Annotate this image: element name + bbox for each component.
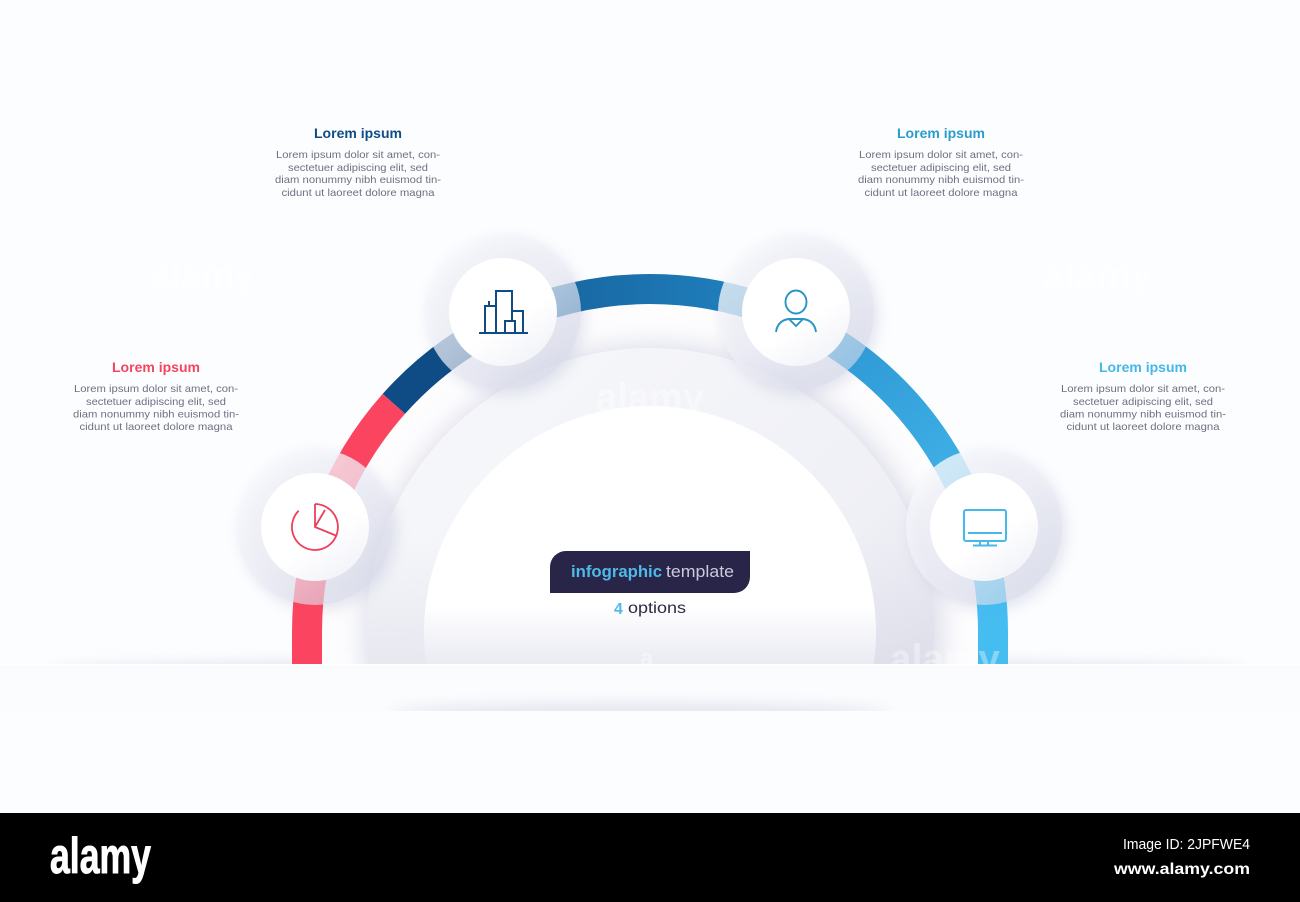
text block: option 2: Lorem ipsum dolor sit amet, con- [276,149,441,161]
text block: option 2: cidunt ut laoreet dolore magna [282,187,435,199]
heading: option 3: Lorem ipsum [897,125,985,141]
text block: option 4: diam nonummy nibh euismod tin- [1060,408,1227,420]
text block: option 1 [73,359,240,433]
watermarks: a [340,645,354,672]
semicircle base [100,336,1200,664]
subtitle: options [628,600,686,617]
icon: pie chart [292,504,338,550]
node 2: buildings [425,234,581,390]
icon: buildings [479,291,528,333]
watermarks: alamy [1042,253,1153,297]
website: www.alamy.com [1113,861,1250,878]
text block: option 3: sectetuer adipiscing elit, sed [871,162,1011,174]
icon: monitor [964,510,1006,546]
node 4: monitor [906,449,1062,605]
footer bar [0,813,1300,902]
text block: option 2: diam nonummy nibh euismod tin- [275,174,442,186]
text block: option 3: Lorem ipsum dolor sit amet, con- [859,149,1024,161]
watermarks: alamy [596,376,705,420]
watermarks: alamy [150,253,256,297]
text block: option 3: diam nonummy nibh euismod tin- [858,174,1025,186]
watermarks: alamy [890,637,1001,681]
heading: option 1: Lorem ipsum [112,359,200,375]
text block: option 1: Lorem ipsum dolor sit amet, con- [74,383,239,395]
text block: option 1: sectetuer adipiscing elit, sed [86,396,226,408]
text block: option 4: Lorem ipsum dolor sit amet, con- [1061,383,1226,395]
segment: red [307,404,394,664]
watermarks: a [640,645,654,672]
shelf below the semicircle [402,700,878,711]
subtitle: 4 [614,601,623,618]
text block: option 4: sectetuer adipiscing elit, sed [1073,396,1213,408]
watermarks [323,506,1000,664]
icon: person [776,290,816,332]
node 3: person [718,234,874,390]
heading: option 4: Lorem ipsum [1099,359,1187,375]
title pill: infographic [571,562,662,581]
image id: Image ID: 2JPFWE4 [1123,837,1250,853]
node shadows [241,239,1066,610]
footer logo: alamy [50,828,151,884]
title pill [550,551,750,593]
text block: option 2: sectetuer adipiscing elit, sed [288,162,428,174]
subtitle [614,600,686,618]
heading: option 2: Lorem ipsum [314,125,402,141]
semicircular ring segments [307,289,993,664]
text block: option 1: cidunt ut laoreet dolore magna [80,421,233,433]
segment: light blue [827,332,1008,664]
text block: option 3: cidunt ut laoreet dolore magna [864,187,1018,199]
text block: option 4: cidunt ut laoreet dolore magna [1066,421,1220,433]
text block: option 3 [858,125,1025,199]
segment: dark blue [382,333,472,414]
segment: mid blue [507,289,793,320]
title pill: template [666,562,734,581]
text block: option 4 [1060,359,1227,433]
text block: option 2 [275,125,442,199]
text block: option 1: diam nonummy nibh euismod tin- [73,408,240,420]
node 1: pie chart [237,449,393,605]
